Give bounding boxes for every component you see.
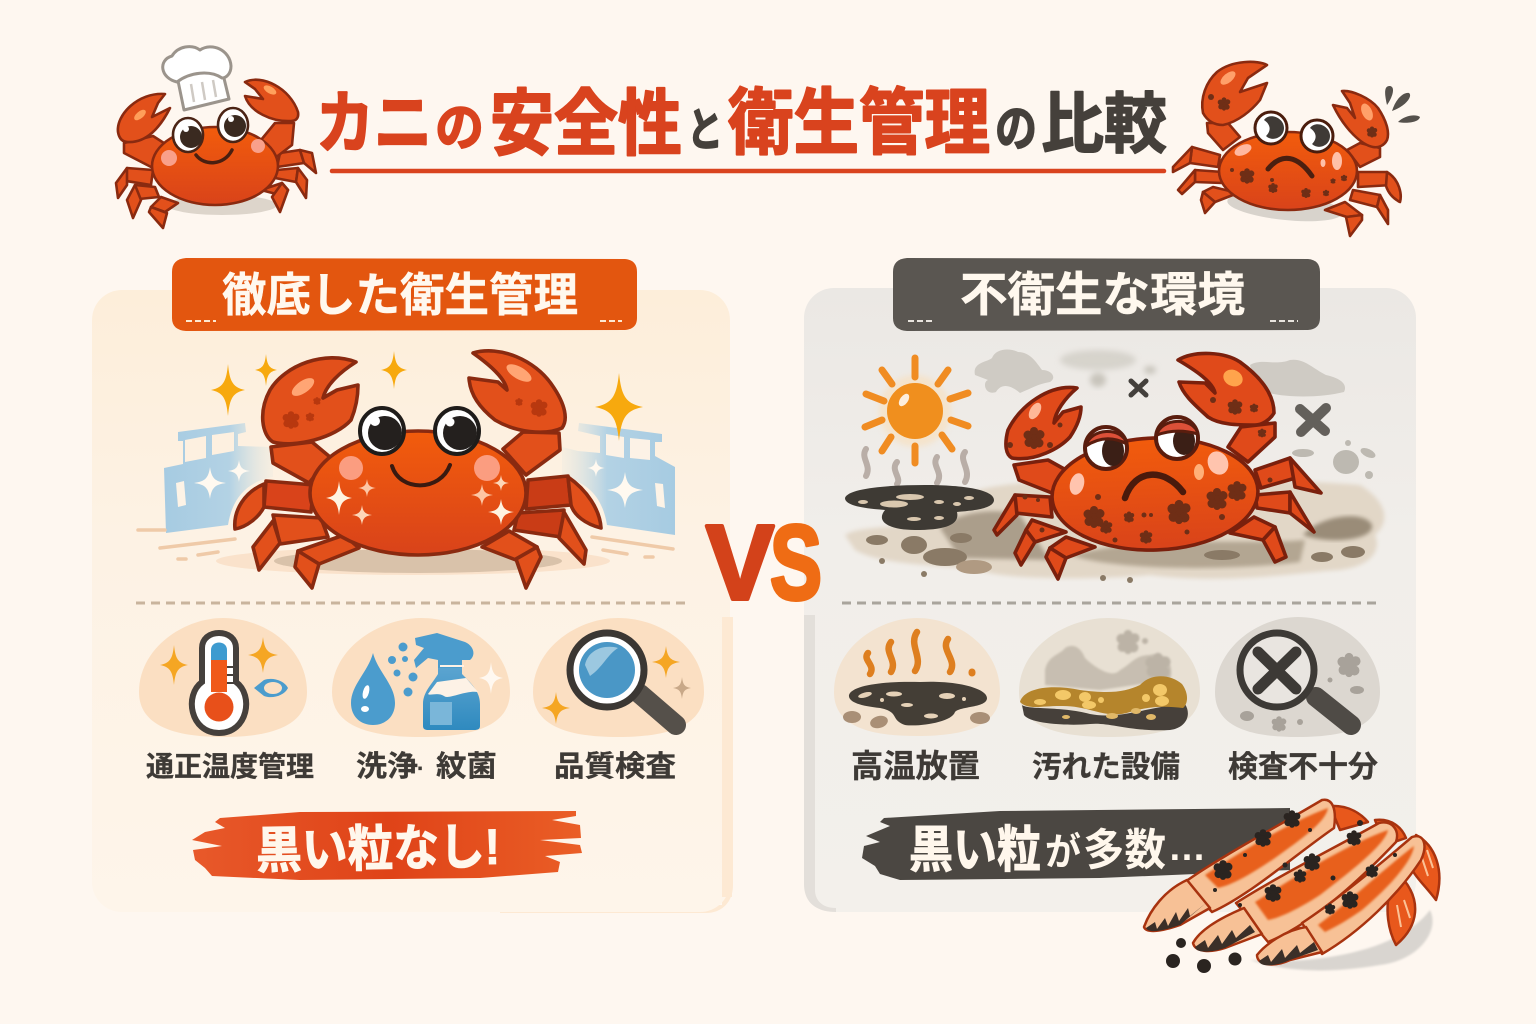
banner: many black grains: 黒い粒 bbox=[909, 822, 1041, 878]
title underline bbox=[332, 169, 1164, 173]
icon: thermometer bbox=[192, 633, 246, 733]
title: 衛生管理 bbox=[728, 84, 990, 164]
banner: many black grains: が bbox=[1045, 832, 1081, 874]
illustration: top-left chef crab bbox=[116, 80, 316, 228]
dirty sad crab bbox=[994, 353, 1321, 579]
clean factory right bbox=[562, 423, 675, 535]
label: 通正温度管理 bbox=[146, 751, 314, 782]
header: good: 徹底した衛生管理 bbox=[222, 269, 578, 321]
VS: S bbox=[770, 504, 822, 622]
icon: mould bbox=[1045, 630, 1171, 690]
label: 汚れた設備 bbox=[1032, 751, 1180, 784]
panel: poor hygiene bbox=[804, 288, 1416, 912]
icon: worry marks bbox=[1385, 86, 1420, 123]
ground shadow bbox=[216, 547, 610, 575]
main happy crab bbox=[235, 351, 601, 588]
leg 3 bbox=[1257, 836, 1424, 965]
illustration: top-right worried crab bbox=[1173, 62, 1401, 236]
label: 品質検査 bbox=[554, 750, 676, 783]
icon: sparkles bbox=[160, 637, 278, 685]
header: poor bbox=[893, 258, 1320, 331]
title bbox=[316, 84, 1167, 165]
header: good bbox=[172, 258, 637, 331]
icon: water drop bbox=[351, 653, 395, 725]
icon: sparkles bbox=[542, 646, 691, 724]
flies bbox=[1131, 381, 1146, 395]
icon: dirt bbox=[1240, 653, 1364, 732]
icon: dirt bbox=[843, 711, 990, 730]
icon: magnifier with cross bbox=[1240, 633, 1351, 725]
item: insufficient inspection bbox=[1215, 617, 1380, 784]
sun bbox=[865, 358, 968, 463]
item: dirty equipment bbox=[1019, 618, 1200, 784]
item: left at high temperature bbox=[834, 618, 1000, 784]
clouds bbox=[975, 350, 1345, 396]
icon: spray bottle bbox=[414, 633, 480, 730]
title: カニ bbox=[316, 86, 432, 162]
header: poor: 不衛生な環境 bbox=[960, 268, 1245, 321]
icon: dirty layers bbox=[1020, 676, 1188, 730]
icon: sparkle bbox=[479, 662, 503, 694]
heat waves bbox=[864, 449, 967, 484]
illustration: dirty crab scene bbox=[845, 350, 1384, 583]
item: temperature control bbox=[139, 618, 314, 782]
label: 高温放置 bbox=[851, 748, 980, 784]
item: quality inspection bbox=[533, 618, 704, 783]
sparkles gold bbox=[211, 351, 643, 441]
leg 2 bbox=[1193, 822, 1397, 952]
label: · bbox=[417, 756, 424, 781]
VS bbox=[706, 504, 822, 622]
label: 検査不十分 bbox=[1228, 751, 1378, 784]
banner: many black grains: 多数 bbox=[1083, 826, 1166, 875]
fins bbox=[1330, 806, 1439, 945]
title: の bbox=[995, 101, 1037, 157]
item: washing and sterilising bbox=[332, 618, 510, 783]
banner: many black grains bbox=[862, 808, 1290, 880]
banner: no black grains bbox=[192, 811, 582, 880]
label: 洗浄 bbox=[356, 750, 418, 783]
banner: many black grains: … bbox=[1168, 827, 1206, 869]
fallen black grains bbox=[1166, 938, 1242, 973]
title: 比較 bbox=[1041, 87, 1167, 161]
clean factory left bbox=[164, 423, 273, 533]
icon: dark puddle bbox=[849, 682, 987, 725]
icon: chef hat bbox=[163, 47, 231, 110]
icon: spray droplets bbox=[388, 642, 418, 696]
title: 安全性 bbox=[490, 85, 682, 165]
black spots bbox=[1213, 810, 1397, 914]
sandy ground bbox=[845, 479, 1384, 583]
icon: steam bbox=[866, 632, 972, 674]
illustration: crab legs with black grains bbox=[1144, 800, 1439, 973]
VS: V bbox=[706, 504, 774, 622]
label bbox=[356, 750, 497, 783]
title: と bbox=[687, 104, 723, 156]
panel: good hygiene bbox=[92, 290, 733, 913]
icon: small ring bbox=[254, 679, 288, 697]
banner: no black grains: 黒い粒なし! bbox=[256, 819, 500, 879]
icon: magnifier bbox=[570, 633, 676, 725]
illustration: clean crab scene bbox=[138, 351, 675, 588]
leg 1 bbox=[1144, 800, 1335, 931]
title: の bbox=[435, 100, 484, 158]
motion lines bbox=[138, 530, 673, 559]
dirt bbox=[1292, 440, 1377, 479]
dark puddle bbox=[845, 485, 994, 530]
label: 紋菌 bbox=[436, 750, 497, 783]
